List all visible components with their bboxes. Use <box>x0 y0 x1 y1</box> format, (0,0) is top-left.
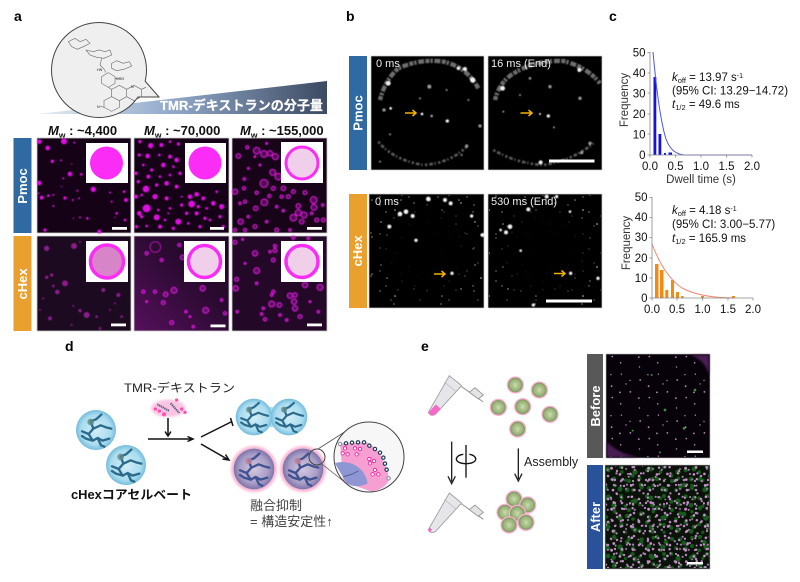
panel b: single-molecule images <box>346 8 602 308</box>
tick labels: 0.5 <box>668 161 684 173</box>
histogram: cHex dwell time <box>621 192 775 316</box>
structure atom labels: N <box>131 85 134 89</box>
Mw column headings: : ~4,400 <box>65 123 117 138</box>
row label: Pmoc <box>349 56 367 170</box>
axes <box>648 52 752 158</box>
row label: Before <box>587 354 603 458</box>
tick labels: 1.0 <box>693 161 709 173</box>
histogram: Pmoc dwell time: Dwell time (s) <box>666 174 736 186</box>
fit statistics: = 49.6 ms <box>686 99 740 111</box>
fit statistics: t <box>672 99 676 111</box>
icon: rotation symbol <box>456 445 476 478</box>
molecular weight wedge <box>38 81 327 114</box>
fusion suppression caption: 融合抑制 <box>250 498 302 513</box>
arrow: centrifuge down <box>448 442 455 484</box>
tick labels: 10 <box>633 130 646 142</box>
fit curve <box>652 244 735 298</box>
panel d label: d <box>65 338 74 354</box>
Mw column headings: M <box>48 123 60 138</box>
fusion suppression caption: = 構造安定性↑ <box>250 514 333 529</box>
fit statistics: 1/2 <box>675 237 686 246</box>
fit statistics: off <box>678 209 687 218</box>
fit statistics: 1/2 <box>675 103 686 112</box>
cHex image at 0 ms <box>369 194 485 308</box>
tick labels: 40 <box>635 212 648 224</box>
tick labels: 20 <box>633 109 646 121</box>
fit statistics <box>672 205 775 246</box>
Pmoc image at 16 ms <box>488 56 602 170</box>
tick labels: 40 <box>633 68 646 80</box>
tick labels: 1.5 <box>720 304 736 316</box>
axes <box>650 197 753 300</box>
structure atom labels: N <box>97 105 100 109</box>
tick labels <box>635 192 761 316</box>
structure atom labels: HN <box>97 68 103 72</box>
Mw column headings: : ~155,000 <box>257 123 324 138</box>
panel e: assembly by centrifugation <box>421 338 710 569</box>
fit statistics: off <box>678 76 687 85</box>
row label: cHex <box>349 194 367 308</box>
fit statistics: (95% CI: 13.29−14.72) <box>672 86 788 98</box>
blue bars <box>654 77 672 155</box>
timestamps: 0 ms <box>375 196 399 208</box>
Mw column headings: w <box>250 130 258 140</box>
row label: cHex: cHex <box>15 268 30 300</box>
Mw column headings: : ~70,000 <box>161 123 220 138</box>
row label: cHex <box>14 236 32 331</box>
fit statistics: -1 <box>737 73 743 80</box>
tick labels: 0.0 <box>642 161 658 173</box>
micrograph: cHex Mw 155000 <box>232 236 327 331</box>
arrow: to stabilized droplets <box>201 444 229 460</box>
tick labels: 30 <box>635 232 648 244</box>
histogram: Pmoc dwell time <box>619 48 788 186</box>
icon: tube with pink solution <box>428 376 483 415</box>
fit statistics: k <box>672 72 679 84</box>
TMR-dextran caption: TMR-デキストラン <box>124 380 235 395</box>
orange bars <box>655 264 735 298</box>
tick labels <box>633 48 760 173</box>
droplets: dispersed <box>490 376 559 438</box>
timestamps <box>375 58 557 208</box>
tick labels: 50 <box>633 48 646 60</box>
tick labels: 1.5 <box>718 161 734 173</box>
fit statistics: t <box>672 233 676 245</box>
panel e label: e <box>421 338 429 354</box>
inhibition line <box>201 418 233 437</box>
arrow: TMR-dextran addition <box>165 418 171 436</box>
tick labels: 50 <box>635 192 648 204</box>
fit statistics <box>672 72 788 112</box>
row label: cHex: cHex <box>350 235 365 267</box>
micrograph: Pmoc Mw 70000 <box>134 138 229 233</box>
fusion suppression caption <box>250 498 333 529</box>
Mw column headings: M <box>240 123 252 138</box>
tick labels: 2.0 <box>745 304 761 316</box>
droplets: assembled <box>496 490 536 534</box>
fit statistics: = 165.9 ms <box>686 233 746 245</box>
fit statistics: -1 <box>730 206 737 213</box>
tick labels: 2.0 <box>744 161 760 173</box>
icon: tube after centrifuge <box>428 493 483 533</box>
icon: TMR-dextran molecules <box>151 398 187 417</box>
speech bubble with TMR-dextran structure <box>52 22 159 118</box>
arrow: horizontal process <box>148 436 193 442</box>
cHex coacervate caption: cHexコアセルベート <box>71 488 192 502</box>
Pmoc image at 0 ms <box>371 56 484 170</box>
Mw column headings: M <box>144 123 156 138</box>
panel b label: b <box>346 8 355 24</box>
row label: Pmoc: Pmoc <box>350 95 366 131</box>
cHex image at 530 ms <box>488 194 602 308</box>
structure atom labels <box>97 68 134 109</box>
fit statistics: (95% CI: 3.00−5.77) <box>672 219 775 231</box>
magnified droplet surface <box>309 422 404 492</box>
Mw column headings: w <box>154 130 162 140</box>
Mw column headings: w <box>58 130 66 140</box>
row label: After: After <box>588 502 603 532</box>
structure atom labels: COO <box>116 77 124 81</box>
micrograph: cHex Mw 70000 <box>134 236 229 331</box>
panel c: dwell time histograms <box>609 8 788 316</box>
droplets: fused coacervates <box>236 399 307 435</box>
Assembly caption: Assembly <box>524 455 579 469</box>
tick labels: 0.0 <box>644 304 660 316</box>
timestamps: 0 ms <box>376 58 400 70</box>
fit statistics: k <box>672 205 679 217</box>
timestamps: 16 ms (End) <box>491 58 551 70</box>
fit statistics: = 4.18 s <box>686 205 731 217</box>
droplets: stabilized pink-coated coacervates <box>231 446 326 492</box>
micrograph: Pmoc Mw 4400 <box>37 138 131 234</box>
row label: Pmoc: Pmoc <box>15 168 30 204</box>
droplet: upper left cHex coacervate <box>76 410 116 450</box>
micrograph: before assembly <box>606 354 710 458</box>
tick labels: 10 <box>635 273 648 285</box>
axis titles: Frequency <box>619 73 631 127</box>
schematic content <box>428 376 559 534</box>
tick labels: 20 <box>635 253 648 265</box>
droplet: lower cHex coacervate <box>106 445 146 485</box>
row label: Pmoc <box>14 138 32 233</box>
micrograph: Pmoc Mw 155000 <box>232 138 327 233</box>
panel d: fusion suppression schematic <box>65 338 404 529</box>
tick labels: 0 <box>639 150 646 162</box>
micrograph: after assembly <box>605 465 710 569</box>
tick labels: 1.0 <box>694 304 710 316</box>
wedge caption: TMR-デキストランの分子量 <box>160 98 323 113</box>
tick labels: 0.5 <box>669 304 685 316</box>
micrograph: cHex Mw 4400 <box>37 236 131 331</box>
timestamps: 530 ms (End) <box>491 196 557 208</box>
Mw column headings <box>48 123 324 140</box>
tick labels: 30 <box>633 88 646 100</box>
arrow: assembly down <box>515 448 522 481</box>
panel a label: a <box>14 8 22 24</box>
chemical structure <box>68 38 146 111</box>
fit curve <box>653 52 752 155</box>
row label: Before: Before <box>588 385 603 427</box>
yellow arrows <box>405 110 565 277</box>
panel c label: c <box>609 8 617 24</box>
fit statistics: = 13.97 s <box>686 72 737 84</box>
row label: After <box>587 465 603 569</box>
panel a: dextran molecular weight confocal grid <box>14 8 327 331</box>
tick labels: 0 <box>641 293 648 305</box>
axis title: Frequency <box>621 216 633 270</box>
